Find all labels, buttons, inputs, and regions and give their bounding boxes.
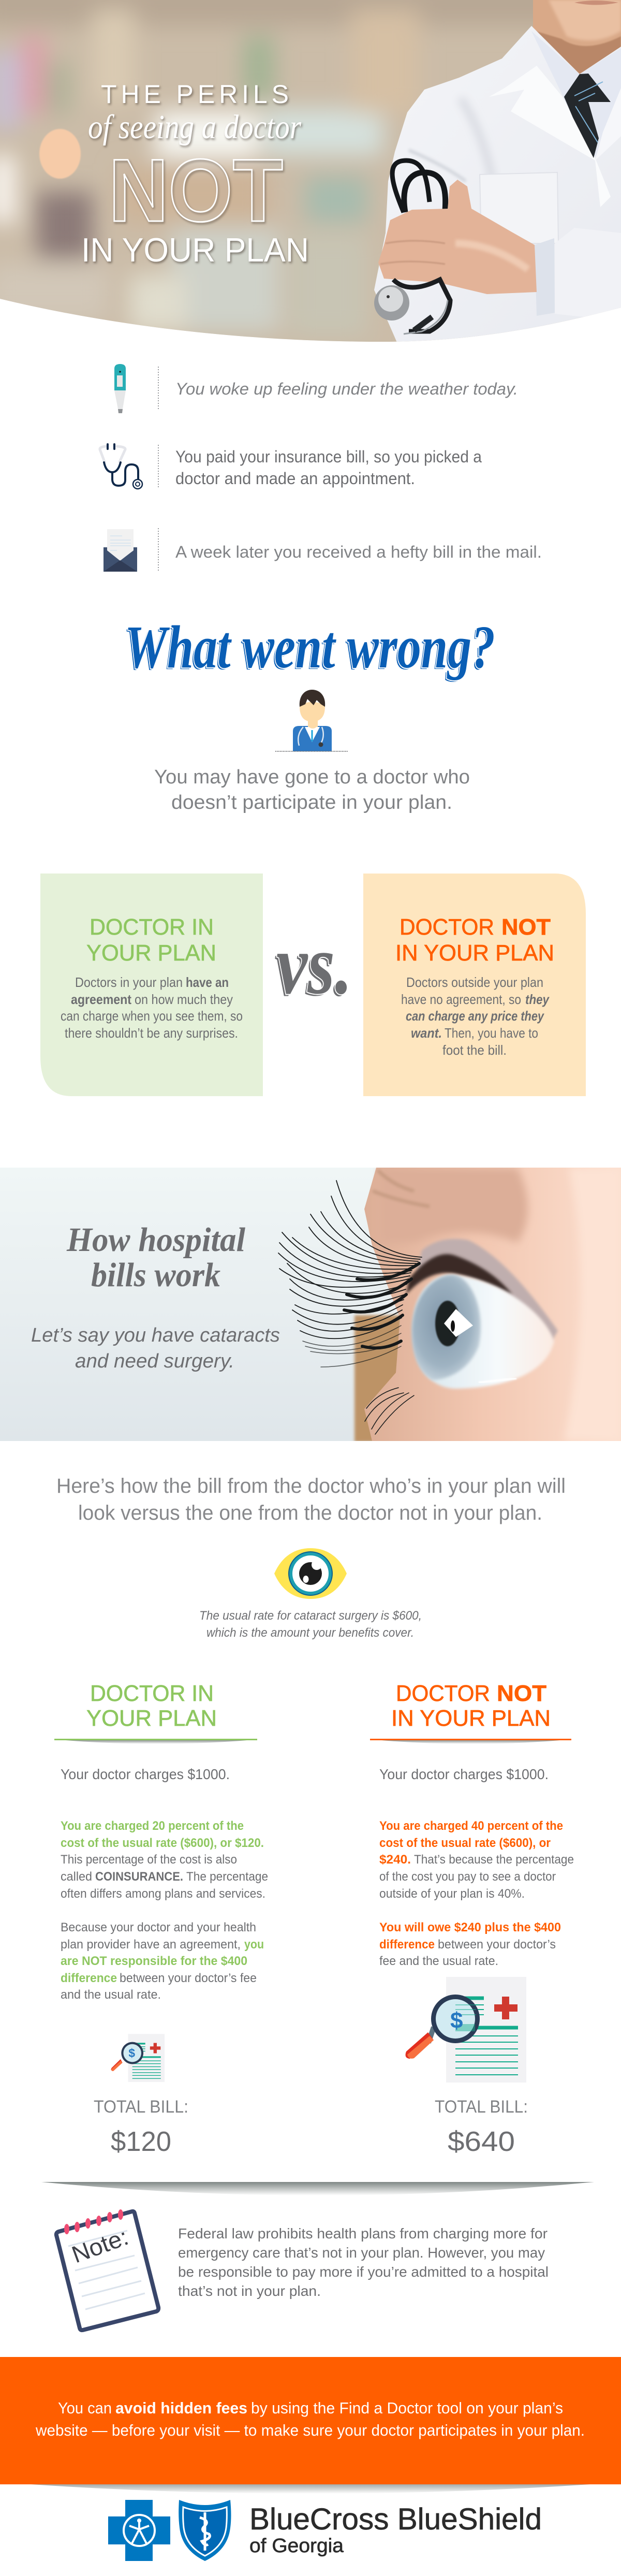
panel text: agreement explanation: agreement xyxy=(71,992,131,1007)
icon: notepad xyxy=(56,2209,158,2330)
out of plan cost paragraph: of the cost you pay to see a doctor xyxy=(379,1870,556,1884)
intro text: Here’s how the bill from the doctor who’s in your plan will xyxy=(56,1475,566,1497)
agreement paragraph: difference xyxy=(61,1971,117,1985)
step 2 text xyxy=(175,447,482,488)
charge text right: Your doctor charges $1000. xyxy=(379,1766,549,1782)
icon: large bill with magnifier: $ xyxy=(450,2008,463,2033)
panel text: agreement explanation: have an xyxy=(186,974,229,990)
story steps xyxy=(100,364,542,572)
icon: large bill with magnifier xyxy=(406,1977,526,2083)
call to action text: avoid hidden fees xyxy=(115,2399,247,2417)
panel: doctor not in your plan xyxy=(363,874,586,1096)
panel text: agreement explanation: Doctors in your plan xyxy=(75,974,183,990)
banner title: How hospital xyxy=(66,1221,246,1259)
icon: thermometer xyxy=(114,364,126,413)
coinsurance paragraph: You are charged 20 percent of the xyxy=(61,1819,244,1833)
out of plan cost paragraph: cost of the usual rate ($600), or xyxy=(379,1836,551,1850)
explanation text xyxy=(154,766,470,813)
step 2 text: You paid your insurance bill, so you picked a xyxy=(175,447,482,466)
panel text: no agreement explanation: they xyxy=(525,992,550,1007)
column heading orange xyxy=(391,1681,551,1731)
agreement paragraph: and the usual rate. xyxy=(61,1988,161,2002)
icon: yellow eye xyxy=(274,1548,347,1599)
call to action text: You can xyxy=(58,2399,112,2417)
column: doctor in your plan xyxy=(54,1681,268,2157)
coinsurance paragraph: The percentage xyxy=(186,1870,268,1884)
agreement paragraph: you xyxy=(244,1938,264,1952)
difference paragraph: fee and the usual rate. xyxy=(379,1954,498,1968)
out of plan cost paragraph: That’s because the percentage xyxy=(414,1853,574,1867)
heading: what went wrong: What went wrong? xyxy=(123,615,494,682)
explanation text: You may have gone to a doctor who xyxy=(154,766,470,788)
note text: that’s not in your plan. xyxy=(178,2283,321,2299)
panel text: no agreement explanation: want. xyxy=(411,1025,442,1041)
total bill label left: TOTAL BILL: xyxy=(94,2097,188,2117)
column heading green: DOCTOR IN xyxy=(90,1681,214,1706)
explanation text: doesn’t participate in your plan. xyxy=(171,792,452,813)
panel text: no agreement explanation: foot the bill. xyxy=(442,1042,507,1058)
panel text: agreement explanation: there shouldn’t be any surprises. xyxy=(65,1025,238,1041)
eye photo xyxy=(0,1168,621,1442)
hero banner xyxy=(0,0,621,347)
step 3 text: A week later you received a hefty bill in the mail. xyxy=(175,543,542,561)
note text: Federal law prohibits health plans from charging more for xyxy=(178,2225,548,2242)
panel text: no agreement explanation: can charge any price they xyxy=(406,1008,544,1024)
out of plan cost paragraph: You are charged 40 percent of the xyxy=(379,1819,563,1833)
column heading green: YOUR PLAN xyxy=(86,1706,217,1731)
panel heading: doctor in your plan xyxy=(86,914,216,966)
panel text: no agreement explanation: have no agreement, so xyxy=(401,992,521,1007)
note text xyxy=(178,2225,549,2299)
hero title: NOT xyxy=(109,141,283,240)
coinsurance paragraph: cost of the usual rate ($600), or $120. xyxy=(61,1836,264,1850)
usual rate note: which is the amount your benefits cover. xyxy=(206,1626,414,1640)
step 3: envelope and text xyxy=(103,528,542,572)
difference paragraph: difference xyxy=(379,1938,435,1952)
out of plan cost paragraph xyxy=(379,1819,574,1901)
call to action text xyxy=(35,2399,585,2439)
hero title: THE PERILS xyxy=(101,80,289,109)
icon: doctor avatar xyxy=(275,690,348,751)
icon: blue shield xyxy=(179,2500,231,2561)
panel text: no agreement explanation: Doctors outside your plan xyxy=(406,974,543,990)
intro text: look versus the one from the doctor not in your plan. xyxy=(78,1502,542,1524)
step 2: stethoscope and text xyxy=(100,444,482,489)
orange divider xyxy=(370,1739,571,1744)
hero title: IN YOUR PLAN xyxy=(81,231,309,269)
icon: blue cross xyxy=(108,2500,170,2561)
usual rate note xyxy=(199,1609,422,1640)
versus mark: vs. xyxy=(274,919,350,1014)
step 1 text: You woke up feeling under the weather today. xyxy=(175,380,518,398)
agreement paragraph: plan provider have an agreement, xyxy=(61,1938,241,1952)
column heading orange: IN YOUR PLAN xyxy=(391,1706,551,1731)
logo wordmark xyxy=(249,2502,542,2557)
column heading green xyxy=(86,1681,217,1731)
hero photo: blurred clinic background and doctor xyxy=(0,0,621,347)
agreement paragraph: between your doctor’s fee xyxy=(120,1971,257,1985)
column heading orange: NOT xyxy=(497,1681,546,1706)
panel heading: doctor in your plan: DOCTOR IN xyxy=(90,914,214,940)
versus mark: vs. xyxy=(276,917,352,1012)
banner: how hospital bills work xyxy=(0,1168,621,1442)
agreement paragraph xyxy=(61,1920,264,2002)
coinsurance paragraph: COINSURANCE. xyxy=(95,1870,183,1884)
difference paragraph: between your doctor’s xyxy=(438,1938,556,1952)
agreement paragraph: are NOT responsible for the $400 xyxy=(61,1954,247,1968)
panel heading: doctor not in your plan: NOT xyxy=(501,914,551,940)
icon: small bill with magnifier: $ xyxy=(128,2046,135,2060)
call to action text: by using the Find a Doctor tool on your plan’s xyxy=(251,2399,563,2417)
panel heading: doctor in your plan: YOUR PLAN xyxy=(86,940,216,966)
note text: emergency care that’s not in your plan. However, you may xyxy=(178,2245,545,2261)
call to action band xyxy=(0,2357,621,2484)
hero title: of seeing a doctor xyxy=(88,108,301,146)
hero title xyxy=(81,80,309,269)
total bill label right: TOTAL BILL: xyxy=(435,2097,528,2117)
column: doctor not in your plan xyxy=(370,1681,574,2157)
panel text: agreement explanation xyxy=(61,974,243,1041)
logo: BlueCross BlueShield of Georgia xyxy=(108,2500,542,2561)
icon: notepad: Note: xyxy=(68,2223,132,2268)
icon: envelope with bill xyxy=(103,529,137,572)
icon: stethoscope xyxy=(100,444,142,489)
total bill amount left: $120 xyxy=(111,2126,171,2157)
column heading orange: DOCTOR xyxy=(396,1681,490,1706)
banner title xyxy=(66,1221,246,1294)
coinsurance paragraph xyxy=(61,1819,268,1901)
coinsurance paragraph: often differs among plans and services. xyxy=(61,1887,265,1901)
heading: what went wrong: What went wrong? xyxy=(125,613,495,681)
difference paragraph xyxy=(379,1920,561,1968)
charge text left: Your doctor charges $1000. xyxy=(61,1766,230,1782)
intro text xyxy=(56,1475,566,1524)
panel heading: doctor not in your plan: DOCTOR xyxy=(400,914,494,940)
total bill amount right: $640 xyxy=(448,2126,515,2157)
panel heading: doctor not in your plan: IN YOUR PLAN xyxy=(395,940,554,966)
step 1: thermometer and text xyxy=(114,364,518,413)
panel text: agreement explanation: can charge when you see them, so xyxy=(61,1008,243,1024)
panel heading: doctor not in your plan xyxy=(395,914,554,966)
icon: small bill with magnifier xyxy=(111,2034,165,2082)
green divider xyxy=(54,1739,257,1744)
panel text: no agreement explanation: Then, you have to xyxy=(445,1025,538,1041)
banner text: and need surgery. xyxy=(75,1350,234,1372)
logo wordmark: BlueCross BlueShield xyxy=(249,2502,542,2536)
coinsurance paragraph: called xyxy=(61,1870,92,1884)
coinsurance paragraph: This percentage of the cost is also xyxy=(61,1853,237,1867)
usual rate note: The usual rate for cataract surgery is $600, xyxy=(199,1609,422,1623)
call to action text: website — before your visit — to make sure your doctor participates in your plan. xyxy=(35,2421,585,2439)
difference paragraph: You will owe $240 plus the $400 xyxy=(379,1920,561,1934)
banner title: bills work xyxy=(91,1256,220,1294)
banner text xyxy=(31,1325,280,1372)
note section xyxy=(56,2209,549,2330)
out of plan cost paragraph: $240. xyxy=(379,1853,411,1867)
step 2 text: doctor and made an appointment. xyxy=(175,469,415,488)
agreement paragraph: Because your doctor and your health xyxy=(61,1920,256,1934)
logo wordmark: of Georgia xyxy=(249,2535,344,2557)
out of plan cost paragraph: outside of your plan is 40%. xyxy=(379,1887,525,1901)
panel text: no agreement explanation xyxy=(401,974,550,1058)
panel: doctor in your plan xyxy=(40,874,263,1096)
note text: be responsible to pay more if you’re admitted to a hospital xyxy=(178,2264,549,2280)
panel text: agreement explanation: on how much they xyxy=(135,992,233,1007)
banner text: Let’s say you have cataracts xyxy=(31,1325,280,1346)
